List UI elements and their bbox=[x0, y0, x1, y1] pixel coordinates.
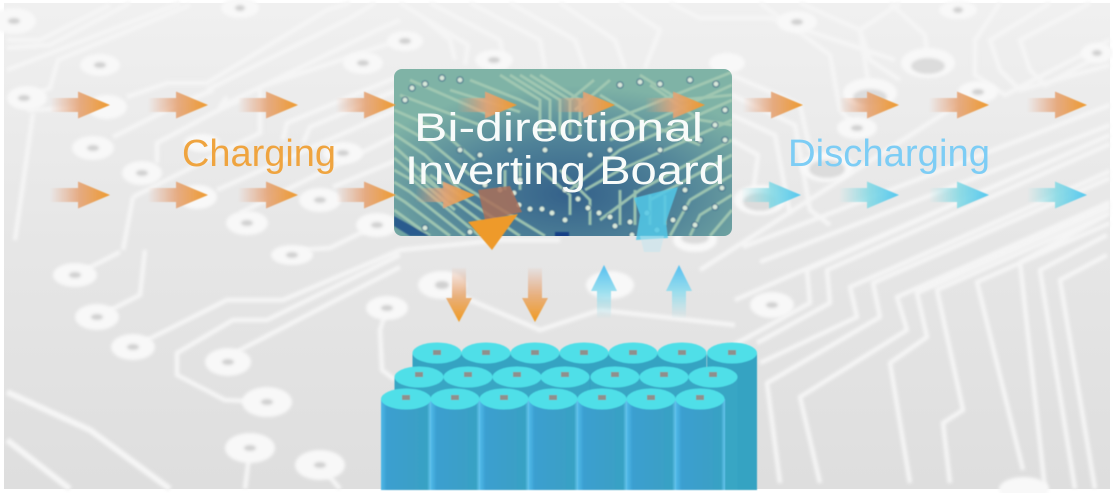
arrows: discharge flow up from battery bbox=[591, 265, 692, 318]
battery: middle row bbox=[394, 366, 738, 490]
charging arrows: bottom row bbox=[50, 182, 475, 208]
board title line 2: Inverting Board bbox=[405, 149, 725, 193]
label: Charging: Charging bbox=[182, 133, 336, 175]
battery: front row bbox=[381, 388, 725, 490]
label: Discharging: Discharging bbox=[788, 133, 990, 175]
battery: back row bbox=[412, 342, 757, 490]
battery pack bbox=[381, 342, 757, 490]
arrows: charge flow down to battery bbox=[446, 268, 548, 322]
charging arrows: top row bbox=[50, 92, 1087, 118]
discharging arrows: right row bbox=[741, 182, 1087, 208]
arrow: bent charging arrow into battery bbox=[468, 186, 522, 250]
board circuit traces bbox=[394, 72, 732, 238]
arrow: discharge arrow from battery to board bbox=[634, 187, 678, 252]
board title line 1: Bi-directional bbox=[414, 106, 703, 150]
panel: bi-directional inverting board bbox=[394, 69, 732, 238]
